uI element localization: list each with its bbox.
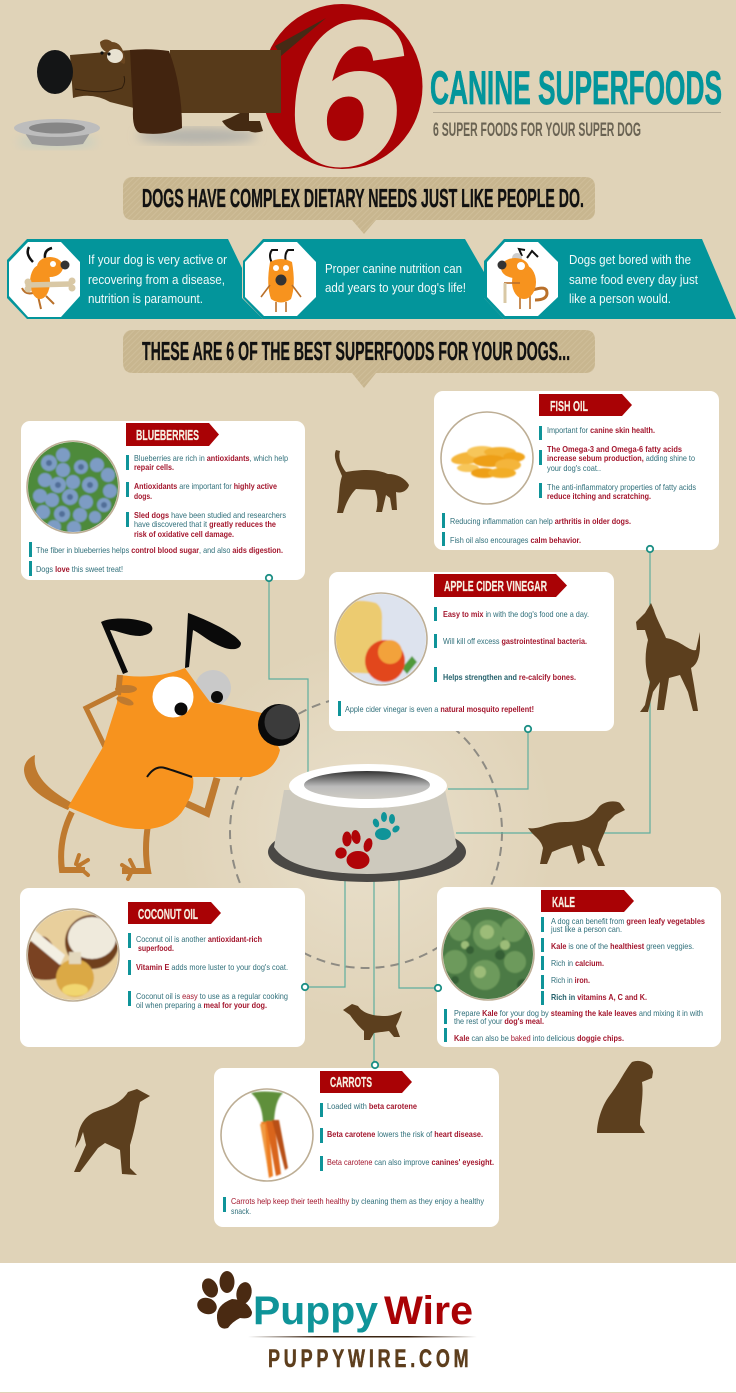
heading: kale: KALE — [552, 894, 575, 911]
text: carrot facts: Beta carotene lowers the risk of heart disease. — [327, 1129, 483, 1139]
panel: coconut oil — [20, 888, 305, 1047]
text: carrot facts: Carrots help keep their teeth healthy by cleaning them as they enjoy a healthy — [231, 1196, 485, 1206]
text: nutrition years — [325, 261, 466, 295]
footer — [0, 1263, 736, 1392]
text: active dogs: nutrition is paramount. — [88, 291, 203, 306]
text: blueberry facts — [29, 453, 288, 576]
text: carrot facts: Loaded with beta carotene — [327, 1101, 417, 1111]
text: active dogs: recovering from a disease, — [88, 272, 225, 287]
text: blueberry facts: risk of oxidative cell damage. — [134, 529, 234, 539]
photo: coconut — [27, 909, 119, 1001]
photo: apple and vinegar — [335, 593, 427, 685]
text: kale facts: the rest of your dog's meal. — [454, 1016, 544, 1026]
text: bored with food: Dogs get bored with the — [569, 252, 691, 267]
text: blueberry facts: Blueberries are rich in antioxidants, which help — [134, 453, 288, 463]
text: carrot facts: snack. — [231, 1206, 251, 1216]
icon: octagon dog front view — [243, 239, 319, 319]
text: vinegar facts: Easy to mix in with the dog's food one a day. — [443, 609, 589, 619]
dashed circle around bowl — [230, 696, 502, 968]
text: blueberry facts: repair cells. — [134, 462, 174, 472]
illustration: orange dog — [24, 613, 300, 879]
text: blueberry facts: have discovered that it greatly reduces the — [134, 519, 276, 529]
icon: octagon dog with cane — [484, 239, 560, 319]
heading: carrots — [320, 1071, 412, 1093]
text: coconut facts: oil when preparing a meal for your dog. — [136, 1000, 267, 1010]
illustration: dachshund with bowl — [14, 18, 326, 149]
silhouette: dachshund — [343, 1004, 402, 1040]
text: kale facts: Kale can also be baked into delicious doggie chips. — [454, 1033, 624, 1043]
photo: fish oil capsules — [441, 412, 533, 504]
text: blueberry facts: dogs. — [134, 491, 152, 501]
photo: kale — [442, 908, 534, 1000]
panel: blueberries — [21, 421, 305, 580]
text: carrot facts: Beta carotene can also improve canines' eyesight. — [327, 1157, 494, 1167]
text: blueberry facts: Dogs love this sweet treat! — [36, 564, 123, 574]
heading: fish oil — [539, 394, 632, 416]
silhouette: retriever — [528, 801, 625, 866]
heading: coconut oil — [128, 902, 221, 924]
silhouette: sniffing dog — [335, 450, 409, 513]
photo: blueberries — [27, 441, 119, 535]
panel: fish oil — [434, 391, 719, 550]
icon: brown paw logo — [195, 1271, 254, 1329]
text: kale facts: A dog can benefit from green leafy vegetables — [551, 916, 705, 926]
text: nutrition years: add years to your dog's life! — [325, 280, 466, 295]
text: kale facts: Prepare Kale for your dog by steaming the kale leaves and mixing it in with — [454, 1008, 703, 1018]
decorative glow behind bowl — [176, 642, 556, 1022]
logo wordmark red: Wire — [384, 1289, 473, 1333]
text: fish oil facts — [442, 425, 696, 546]
photo: carrots — [221, 1089, 313, 1181]
connector dots — [266, 546, 653, 1068]
text: blueberry facts: Sled dogs have been studied and researchers — [134, 510, 286, 520]
callout: dietary needs — [123, 177, 595, 234]
silhouette: sitting dog — [597, 1061, 653, 1133]
panel: apple cider vinegar — [329, 572, 614, 731]
text: fish oil facts: increase sebum production, adding shine to — [547, 453, 695, 463]
text: coconut facts: Coconut oil is another antioxidant-rich — [136, 934, 262, 944]
logo wordmark: Puppy — [253, 1289, 379, 1333]
heading: apple cider vinegar — [434, 574, 567, 597]
silhouette: greyhound — [74, 1089, 150, 1175]
heading: carrots: CARROTS — [330, 1074, 372, 1091]
text: fish oil facts: reduce itching and scratching. — [547, 491, 651, 501]
icon: teal paw — [372, 812, 401, 840]
heading: apple cider vinegar: APPLE CIDER VINEGAR — [444, 578, 547, 595]
text: coconut facts — [128, 933, 288, 1010]
illustration: dog bowl with paw prints — [268, 764, 466, 882]
text: bored with food: same food every day just — [569, 272, 698, 287]
text: active dogs: If your dog is very active or — [88, 252, 228, 267]
icon: red circle with number 6 — [262, 0, 422, 206]
silhouette: standing dog — [636, 603, 700, 712]
heading: kale — [541, 890, 634, 912]
text: bored with food: like a person would. — [569, 291, 671, 306]
text: kale facts: Rich in calcium. — [551, 958, 604, 968]
icon: red paw — [333, 829, 374, 869]
text: fish oil facts: your dog's coat.. — [547, 463, 601, 473]
panel: kale — [437, 887, 721, 1047]
text: coconut facts: superfood. — [138, 943, 174, 953]
text: vinegar facts: Will kill off excess gastrointestinal bacteria. — [443, 636, 587, 646]
text: fish oil facts: Important for canine skin health. — [547, 425, 655, 435]
panel: carrots — [214, 1068, 499, 1227]
text: fish oil facts: The Omega-3 and Omega-6 fatty acids — [547, 444, 682, 454]
text: blueberry facts: The fiber in blueberries helps control blood sugar, and also aids digestion. — [36, 545, 283, 555]
text: fish oil facts: Reducing inflammation can help arthritis in older dogs. — [450, 516, 631, 526]
text: blueberry facts: Antioxidants are important for highly active — [134, 481, 277, 491]
text: nutrition years: Proper canine nutrition can — [325, 261, 462, 276]
text: carrot facts — [223, 1101, 494, 1216]
heading: blueberries — [126, 423, 219, 446]
text: kale facts — [444, 916, 705, 1043]
connector lines — [269, 552, 650, 1062]
heading: fish oil: FISH OIL — [550, 398, 588, 415]
text: active dogs — [88, 252, 228, 306]
website address: PUPPYWIRE.COM — [268, 1344, 472, 1373]
text: vinegar facts: Apple cider vinegar is even a natural mosquito repellent! — [345, 704, 534, 714]
text: fish oil facts: The anti-inflammatory properties of fatty acids — [547, 482, 696, 492]
text: bored with food — [569, 252, 698, 306]
heading: coconut oil: COCONUT OIL — [138, 906, 198, 923]
text: kale facts: Kale is one of the healthiest green veggies. — [551, 941, 694, 951]
panel: teal facts band — [7, 239, 736, 319]
text: vinegar facts: Helps strengthen and re-calcify bones. — [443, 672, 576, 682]
callout: best superfoods — [123, 330, 595, 388]
text: coconut facts: Vitamin E adds more luster to your dog's coat. — [136, 962, 288, 972]
heading: blueberries: BLUEBERRIES — [136, 427, 199, 444]
icon: octagon dog with bone — [7, 239, 82, 319]
text: coconut facts: Coconut oil is easy to use as a regular cooking — [136, 991, 288, 1001]
text: kale facts: just like a person can. — [550, 924, 622, 934]
text: kale facts: Rich in vitamins A, C and K. — [551, 992, 647, 1002]
text: vinegar facts — [338, 607, 589, 716]
text: kale facts: Rich in iron. — [551, 975, 590, 985]
text: fish oil facts: Fish oil also encourages calm behavior. — [450, 535, 581, 545]
